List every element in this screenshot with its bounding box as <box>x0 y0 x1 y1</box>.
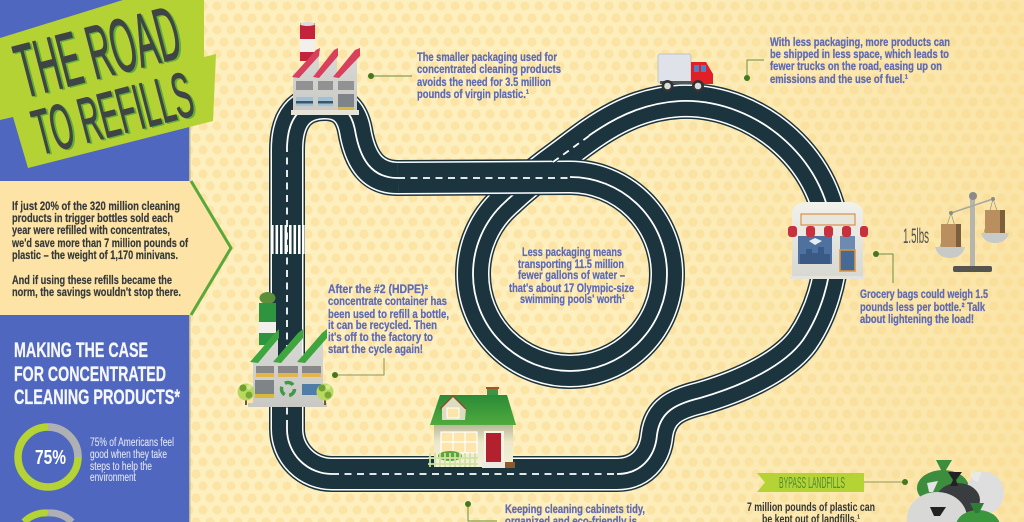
text: less packaging trucks: With less packaging, more products can <box>770 35 950 49</box>
text: less packaging trucks: fewer trucks on the road, easing up on <box>770 59 942 73</box>
text: smaller packaging: avoids the need for 3.5 million <box>417 75 551 89</box>
panel: left column blue background <box>0 0 190 522</box>
text: recycling: start the cycle again! <box>328 342 423 356</box>
donut: second, cropped <box>24 513 72 522</box>
icon: truck <box>658 54 713 92</box>
text: less packaging trucks: emissions and the use of fuel.¹ <box>770 72 908 86</box>
connector: factory note <box>368 73 412 79</box>
heading: making the case: MAKING THE CASE <box>14 339 148 362</box>
donut: 75%: 75% <box>35 447 66 469</box>
text: less packaging water: swimming pools' worth¹ <box>520 292 625 306</box>
text: grocery bags <box>860 287 988 326</box>
banner: bypass landfills <box>757 473 864 492</box>
text: 1.5lbs <box>903 225 929 248</box>
panel: intro arrow <box>0 181 231 315</box>
intro text: year were refilled with concentrates, <box>12 223 170 237</box>
icon: green factory <box>238 292 334 407</box>
stat text: 75% of Americans: environment <box>90 472 137 484</box>
stat text: 75% of Americans: 75% of Americans feel <box>90 437 174 449</box>
text: less packaging water: that's about 17 Olympic-size <box>509 281 634 295</box>
text: less packaging water: Less packaging means <box>522 245 622 259</box>
title: the road to refills <box>7 0 202 170</box>
icon: fence <box>428 451 478 467</box>
stat text: 75% of Americans: steps to help the <box>90 461 152 473</box>
icon: recycling symbol <box>282 382 294 396</box>
donut: 75% <box>18 427 78 487</box>
text: landfills <box>747 500 875 522</box>
text: less packaging water: fewer gallons of water – <box>518 268 625 282</box>
icon: grocery store <box>788 202 868 279</box>
text: recycling <box>328 282 449 356</box>
stat text: 75% of Americans: good when they take <box>90 449 167 461</box>
road <box>287 101 832 474</box>
stat text: 75% of Americans <box>90 437 174 484</box>
intro text: And if using these refills became the <box>12 273 172 287</box>
icon: red factory <box>291 22 360 115</box>
icon: balance scale <box>935 192 1009 272</box>
text: recycling: been used to refill a bottle, <box>328 307 449 321</box>
intro text: plastic – the weight of 1,170 minivans. <box>12 248 178 262</box>
text: recycling: it's off to the factory to <box>328 330 433 344</box>
connector: cabinets note <box>465 501 497 521</box>
icon: trees <box>238 384 334 405</box>
heading: making the case: FOR CONCENTRATED <box>14 363 166 386</box>
text: recycling: concentrate container has <box>328 294 447 308</box>
intro text: we'd save more than 7 million pounds of <box>11 236 189 250</box>
text: smaller packaging: The smaller packaging used for <box>417 50 557 64</box>
text: less packaging water <box>509 245 634 306</box>
heading: making the case <box>14 339 181 409</box>
text: smaller packaging: pounds of virgin plastic.¹ <box>417 87 529 101</box>
text: less packaging trucks: be shipped in less space, which leads to <box>770 47 949 61</box>
title banner: TO REFILLS <box>25 58 200 169</box>
title banner <box>0 0 216 170</box>
text: less packaging water: transporting 11.5 million <box>518 257 624 271</box>
text: smaller packaging: concentrated cleaning products <box>417 62 561 76</box>
connector: truck note <box>744 60 764 81</box>
crosswalk <box>271 225 305 254</box>
text: recycling: After the #2 (HDPE)² <box>328 282 428 296</box>
connector: recycling note <box>332 358 384 378</box>
text: less packaging trucks <box>770 35 950 86</box>
intro text: If just 20% of the 320 million cleaning <box>12 199 180 213</box>
icon: trash bags <box>907 460 1004 522</box>
heading: making the case: CLEANING PRODUCTS* <box>14 386 181 409</box>
text: grocery bags: about lightening the load! <box>860 312 974 326</box>
intro text: products in trigger bottles sold each <box>12 211 173 225</box>
title banner: TO REFILLS <box>27 59 202 170</box>
intro text: norm, the savings wouldn't stop there. <box>12 285 181 299</box>
intro text <box>11 199 189 299</box>
text: grocery bags: pounds less per bottle.² Talk <box>860 300 985 314</box>
text: smaller packaging <box>417 50 561 101</box>
icon: house <box>428 387 516 468</box>
text: recycling: it can be recycled. Then <box>328 318 437 332</box>
connector: store note <box>873 251 893 283</box>
connector: landfill note <box>864 479 908 485</box>
banner: bypass landfills: BYPASS LANDFILLS <box>779 475 845 492</box>
